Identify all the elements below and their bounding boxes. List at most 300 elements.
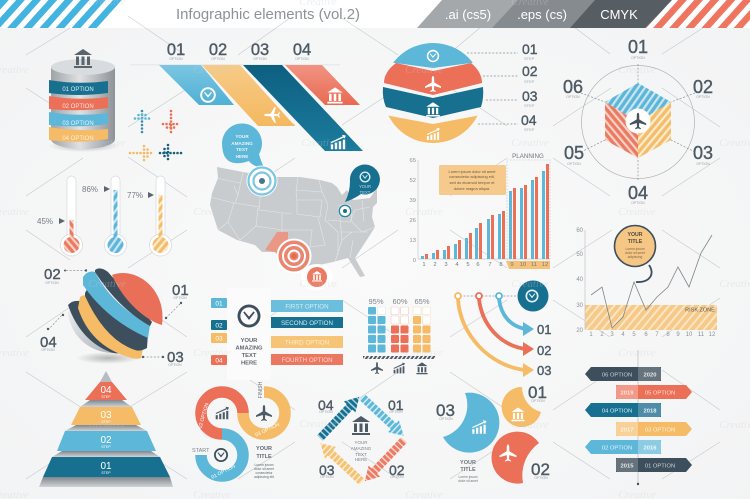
speech bubble: HERE (236, 154, 248, 159)
crescent blue (443, 393, 499, 453)
creative market watermarks: Creative (618, 347, 656, 359)
title text (254, 446, 274, 479)
creative market watermarks: Creative (405, 64, 443, 76)
title text (458, 460, 478, 483)
center text: YOUR (354, 440, 368, 445)
option 01: 01 OPTION (62, 87, 94, 93)
creative market watermarks: Creative (299, 278, 337, 290)
band: orange (78, 295, 143, 359)
level 01: 01 (100, 461, 112, 472)
creative market watermarks: Creative (511, 137, 549, 149)
level 01 (43, 457, 170, 477)
title text: Lorem ipsum (458, 475, 478, 479)
planning highlight: PLANNING (512, 153, 544, 160)
x labels: 8 (499, 262, 503, 268)
row 02 (585, 440, 661, 454)
step labels: STEP (524, 103, 535, 108)
x labels: 7 (655, 332, 659, 338)
row 05: 05 OPTION (645, 390, 675, 396)
labels (318, 397, 405, 479)
thermometer 86%: 86% (82, 185, 98, 194)
axis (418, 160, 550, 259)
labels: 03 (537, 363, 551, 378)
labels: OPTION (320, 475, 334, 479)
row 02: 02 OPTION (602, 446, 632, 452)
creative market watermarks: Creative (301, 137, 339, 149)
start label: START (192, 448, 210, 454)
header tabs (417, 0, 750, 28)
labels (537, 322, 551, 378)
waffle chart (363, 297, 435, 374)
title bubble: Lorem ipsum (625, 247, 645, 251)
label 04: 04 (40, 334, 57, 351)
step labels: 04 (521, 112, 537, 128)
arrow 02 coral (476, 293, 534, 356)
title bubble: TITLE (628, 239, 643, 245)
icon: bank (352, 416, 370, 435)
x labels: 12 (542, 262, 548, 268)
arrow 04 teal (314, 391, 365, 444)
timeline (585, 350, 692, 485)
x labels: 4 (455, 262, 459, 268)
y labels: 39 (410, 198, 416, 204)
labels (436, 383, 550, 480)
level 04 (85, 382, 127, 400)
bubble: your text (345, 165, 380, 202)
note box: Lorem ipsum dolor sit amet (449, 169, 496, 174)
arrow left (160, 145, 182, 161)
level 04: 04 (100, 385, 112, 396)
header stripes: coral (645, 0, 750, 28)
bubble: your text: TEXT (360, 190, 371, 195)
planning highlight (506, 153, 550, 269)
option numbers: 05 (564, 143, 584, 163)
curved arrows (455, 280, 551, 378)
label 01: OPTION (173, 296, 187, 300)
dotted arrows (130, 111, 182, 161)
labels: 03 (319, 462, 335, 478)
creative market watermarks: Creative (193, 206, 231, 218)
option 03: 03 OPTION (62, 121, 94, 127)
tab: eps (492, 0, 600, 28)
creative market watermarks: Creative (405, 347, 443, 359)
center text: AMAZING (351, 446, 372, 451)
center text: TEXT (355, 452, 367, 457)
arrow 01 blue (357, 391, 409, 442)
labels: OPTION (319, 410, 333, 414)
ribbon: blue (159, 65, 234, 105)
x labels: 10 (686, 332, 693, 338)
creative market watermarks: Creative (511, 278, 549, 290)
cylinder options (48, 49, 120, 152)
card text: AMAZING (235, 346, 263, 352)
option numbers: 01 (628, 37, 648, 57)
face: right (638, 102, 671, 158)
title text: dolor sit amet (254, 467, 274, 471)
icon: chart (216, 407, 229, 419)
line chart with risk zone (576, 226, 717, 338)
tab: ai: .ai (cs5) (445, 7, 491, 22)
x labels: 6 (476, 262, 480, 268)
map of USA (210, 165, 380, 290)
icon: bank (416, 362, 428, 374)
face: left (605, 102, 638, 158)
note box: consectetur adipiscing elit, (449, 174, 495, 179)
option labels (198, 402, 281, 481)
tab: eps: .eps (cs) (517, 7, 567, 22)
center text: HERE (355, 457, 367, 462)
option labels: 01 OPTION (211, 463, 237, 481)
step labels: STEP (524, 56, 535, 61)
level 02: 02 (100, 435, 112, 446)
level 04: STEP (101, 395, 111, 399)
bar third: THIRD OPTION (285, 340, 329, 346)
title text: TITLE (460, 467, 476, 473)
labels: OPTION (389, 410, 403, 414)
card text: TEXT (242, 353, 257, 359)
thermometers (37, 176, 172, 256)
crescent orange (502, 387, 541, 427)
creative market watermarks: Creative (511, 419, 549, 431)
labels: 03 (436, 401, 455, 420)
level 03 (71, 407, 141, 425)
speech bubble: AMAZING (231, 141, 253, 146)
center text (351, 440, 372, 462)
waffle chart: 65% (414, 297, 430, 306)
creative market watermarks: Creative (299, 418, 337, 430)
card text: HERE (241, 360, 257, 366)
segmented circle (380, 40, 538, 146)
icon: chart (394, 363, 405, 373)
option labels: 02 OPTION (198, 402, 210, 429)
note box: sed do eiusmod tempor et (450, 180, 495, 185)
tag 03: 03 (215, 336, 223, 342)
diagonal ribbons (130, 64, 363, 151)
coral bars (425, 164, 549, 259)
title bubble (614, 226, 656, 282)
segment blue (393, 43, 473, 68)
bubble: your text: YOUR (359, 184, 371, 189)
tab: cmyk: CMYK (600, 7, 638, 22)
coral dome (112, 273, 163, 325)
speech bubble: YOUR (235, 134, 249, 139)
arrow down (163, 111, 179, 134)
x labels: 5 (466, 262, 470, 268)
title bubble: dolor sit amet (625, 251, 645, 255)
x labels: 11 (531, 262, 537, 268)
level 02 (57, 431, 156, 451)
diamond arrows (314, 391, 410, 488)
option 02: 02 OPTION (62, 104, 94, 110)
labels: 02 (537, 343, 551, 358)
number 03: OPTION (253, 57, 267, 61)
creative market watermarks: Creative (193, 347, 231, 359)
row 04: 2018 (644, 408, 657, 414)
row 03: 2017 (621, 428, 633, 434)
option labels: 03 OPTION (254, 422, 281, 438)
creative market watermarks: Creative (405, 206, 443, 218)
creative market watermarks: Creative (193, 64, 231, 76)
s-curve (192, 381, 285, 481)
x labels: 6 (644, 332, 648, 338)
level 01: STEP (101, 471, 111, 475)
label 02: 02 (44, 266, 61, 283)
segment orange (243, 392, 285, 434)
row 04 (585, 403, 661, 417)
title text: YOUR (460, 460, 476, 466)
y labels (410, 158, 416, 264)
pyramid (39, 371, 173, 487)
option numbers: OPTION (696, 162, 710, 166)
y labels: 26 (410, 218, 416, 224)
x labels: 1 (422, 262, 426, 268)
target: coral (265, 232, 310, 273)
row 06 (585, 367, 661, 381)
option numbers: OPTION (566, 95, 580, 99)
row 01: 2015 (621, 464, 634, 470)
axis (584, 230, 586, 330)
segment teal (383, 87, 483, 118)
labels: 01 (528, 383, 547, 402)
labels: 01 (537, 322, 551, 337)
row 03 (616, 422, 692, 436)
creative market watermarks: Creative (88, 278, 126, 290)
step labels: 02 (522, 63, 538, 79)
waffle chart: 95% (368, 297, 384, 306)
option numbers: OPTION (631, 56, 645, 60)
labels: 02 (531, 460, 550, 479)
option numbers: 06 (563, 77, 583, 97)
stacked sphere (40, 266, 189, 367)
row 05: 2019 (621, 390, 634, 396)
grey dome (68, 305, 120, 353)
segment coral (201, 392, 243, 434)
creative market watermarks: Creative (88, 418, 126, 430)
bar chart (410, 153, 550, 269)
row 04: 04 OPTION (602, 408, 632, 414)
title: Infographic elements (vol.2) (176, 6, 360, 23)
risk zone (585, 305, 717, 330)
label 03: 03 (167, 349, 184, 366)
option numbers (563, 37, 713, 205)
level 03: STEP (101, 420, 111, 424)
arrow 03 orange (315, 437, 367, 488)
segment blue (201, 434, 243, 476)
y labels: 50 (576, 252, 584, 258)
icon: plane (371, 362, 383, 374)
step labels: 01 (522, 41, 538, 57)
target: teal (338, 204, 352, 218)
arrow right (130, 146, 152, 161)
labels: OPTION (390, 475, 404, 479)
column coral (391, 307, 408, 352)
bar second: SECOND OPTION (281, 320, 333, 327)
title text: consectetur (255, 471, 273, 475)
label 01: 01 (172, 282, 189, 299)
tag 01: 01 (215, 300, 223, 308)
hazard strip (363, 356, 435, 359)
icon: plane (256, 405, 272, 421)
label 02 (44, 266, 87, 285)
title text: TITLE (256, 454, 272, 460)
tag 02: 02 (215, 322, 223, 330)
option cards (211, 288, 343, 380)
number 01: OPTION (169, 57, 183, 61)
label 03: OPTION (168, 363, 182, 367)
crescents (436, 383, 550, 484)
label 02: OPTION (45, 281, 59, 285)
labels: OPTION (439, 417, 453, 421)
y labels: 60 (576, 228, 584, 234)
x labels: 7 (488, 262, 492, 268)
label 04: OPTION (41, 348, 55, 352)
option numbers: 02 (693, 77, 713, 97)
target: blue (246, 166, 278, 196)
segment coral (384, 63, 482, 95)
y labels: 52 (410, 178, 416, 184)
option 04: 04 OPTION (62, 136, 94, 142)
icon: clock (238, 304, 260, 328)
speech bubble (222, 123, 265, 169)
number 03: 03 (251, 41, 269, 59)
y labels: 0 (413, 258, 416, 264)
option numbers: OPTION (696, 95, 710, 99)
arrow 02 coral (359, 434, 410, 487)
speech bubble: TEXT (236, 147, 248, 152)
row 02: 2016 (644, 446, 657, 452)
face: top (605, 83, 671, 122)
y labels: 30 (576, 303, 584, 309)
x labels: 1 (589, 332, 593, 338)
icon: bank (426, 102, 440, 116)
step labels: 03 (522, 88, 538, 104)
x labels: 4 (621, 332, 625, 338)
title text: YOUR (256, 446, 272, 452)
icon: plane badge (626, 108, 650, 134)
label 01 (165, 282, 189, 319)
row 05 (616, 385, 692, 399)
title text: Lorem ipsum (254, 463, 274, 467)
crescent coral (491, 432, 539, 484)
bar first: FIRST OPTION (285, 304, 329, 310)
number 04: OPTION (295, 57, 309, 61)
tab: cmyk (570, 0, 672, 28)
header stripes: blue (0, 0, 125, 28)
arrow 01 blue (496, 293, 534, 336)
option numbers: OPTION (631, 201, 645, 205)
x labels: 5 (632, 332, 636, 338)
y labels: 20 (576, 328, 584, 334)
step labels (467, 41, 538, 132)
x labels: 9 (676, 332, 680, 338)
bar fourth: FOURTH OPTION (281, 357, 333, 364)
y labels: 65 (410, 158, 416, 164)
creative market watermarks: Creative (618, 64, 656, 76)
step labels: STEP (524, 79, 535, 84)
x labels: 2 (600, 332, 604, 338)
thermometer 45%: 45% (37, 217, 53, 226)
title text: adipiscing elit (254, 475, 274, 479)
card text: YOUR (241, 338, 258, 344)
level 03: 03 (100, 410, 112, 421)
hexagonal cube (563, 37, 713, 205)
icon: chart (427, 128, 440, 140)
icon: bank (74, 49, 92, 68)
y labels (576, 228, 584, 334)
x labels: 3 (444, 262, 448, 268)
level 02: STEP (101, 445, 111, 449)
row 03: 03 OPTION (645, 428, 675, 434)
bubble: coral bank (301, 264, 333, 290)
line (591, 235, 712, 328)
row 01 (616, 458, 692, 472)
note box: dolore magna aliqua. (454, 186, 490, 191)
arrow 03 orange (455, 293, 534, 377)
x labels (422, 262, 548, 268)
waffle chart: 60% (392, 297, 408, 306)
finish label: FINISH (258, 381, 264, 398)
x labels: 2 (433, 262, 437, 268)
option numbers: OPTION (567, 162, 581, 166)
number 04: 04 (293, 41, 311, 59)
risk zone: RISK ZONE (685, 308, 715, 314)
clock badge (518, 280, 548, 312)
creative market watermarks: Creative (618, 206, 656, 218)
x labels: 12 (709, 332, 716, 338)
column blue (368, 307, 386, 352)
labels: 04 (318, 397, 334, 413)
icon: clock (214, 448, 228, 462)
y labels: 40 (576, 277, 584, 283)
x labels: 10 (520, 262, 526, 268)
note box (439, 165, 506, 195)
icon: plane (425, 76, 441, 92)
y labels: 13 (410, 238, 416, 244)
tab: ai (417, 0, 525, 28)
labels: 01 (388, 397, 404, 413)
label 03 (142, 349, 184, 367)
labels: OPTION (534, 476, 548, 480)
arrow up (135, 111, 150, 134)
row 01: 01 OPTION (645, 464, 675, 470)
blue bars (421, 171, 545, 259)
x labels: 3 (610, 332, 614, 338)
row 06: 2020 (644, 372, 656, 378)
label 04 (40, 314, 64, 352)
labels: OPTION (531, 399, 545, 403)
creative market watermarks: Creative (88, 137, 126, 149)
option numbers: 03 (693, 143, 713, 163)
step labels: STEP (524, 127, 535, 132)
tag 04: 04 (215, 358, 223, 364)
header numbers 01-04 (167, 41, 311, 61)
title text: dolor sit amet (458, 479, 478, 483)
number 02: 02 (209, 41, 227, 59)
title bubble: YOUR (628, 232, 643, 238)
band: blue (83, 272, 150, 338)
card text (235, 338, 263, 366)
x labels: 9 (510, 262, 514, 268)
x labels: 8 (666, 332, 670, 338)
ribbon: coral (285, 65, 360, 105)
x labels (589, 332, 716, 338)
thermometer 77%: 77% (127, 191, 143, 200)
number 01: 01 (167, 41, 185, 59)
segment orange (388, 116, 478, 143)
labels: 02 (389, 462, 405, 478)
row 06: 06 OPTION (602, 372, 632, 378)
icon: clock (427, 50, 439, 62)
